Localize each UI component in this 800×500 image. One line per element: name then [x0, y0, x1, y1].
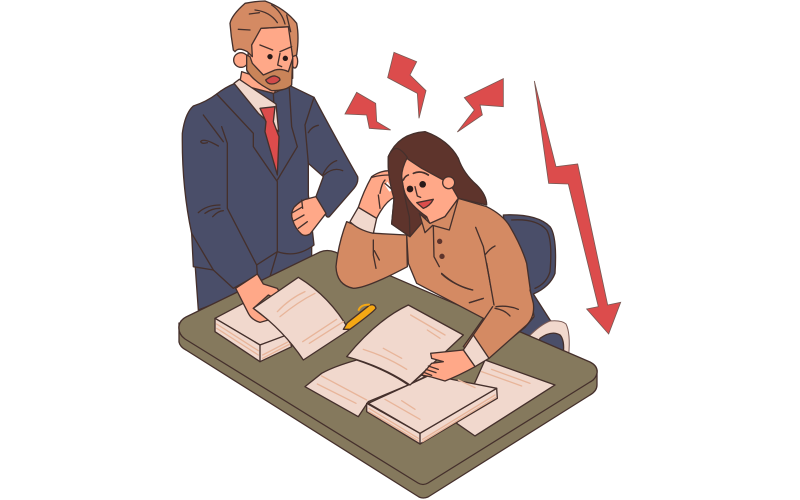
- woman back hair: [388, 132, 487, 237]
- woman sweater torso: [407, 198, 534, 358]
- woman sleeve seams: [442, 263, 518, 316]
- loose sheet under book: [457, 360, 555, 436]
- man hand on hip: [291, 197, 326, 235]
- desk: [179, 250, 597, 498]
- desk top surface: [179, 250, 597, 484]
- left paper stack: [215, 303, 303, 362]
- chair back and base: [503, 215, 563, 353]
- lifted page: [253, 277, 349, 360]
- woman front hair strand: [388, 148, 410, 237]
- woman cuff at wrist: [463, 335, 489, 367]
- chair seat seen through handle: [537, 333, 564, 353]
- woman raised arm: [336, 222, 407, 288]
- woman: stressed employee: [336, 132, 534, 358]
- pen: [343, 305, 376, 329]
- turning page: [347, 305, 463, 385]
- man jacket: [182, 83, 358, 288]
- open book block: [367, 375, 497, 444]
- papers and hands on desk: [215, 263, 555, 444]
- bolt left: [345, 92, 391, 130]
- chair: [503, 215, 569, 355]
- chair handle: [529, 321, 569, 355]
- man trousers: [195, 245, 312, 310]
- bolt center: [388, 52, 426, 118]
- man shirt collar: [234, 79, 279, 132]
- man: angry boss: [182, 1, 358, 310]
- lightning bolts and falling arrow: [345, 52, 621, 334]
- woman hand on head: [358, 171, 395, 218]
- man neck: [240, 72, 277, 104]
- desk side edge: [179, 323, 597, 498]
- falling zigzag arrow: [534, 81, 621, 334]
- woman sweater details and buttons: [373, 227, 518, 316]
- woman cuff: [350, 207, 377, 233]
- man red tie: [260, 107, 279, 175]
- man hand on paper: [236, 274, 279, 322]
- woman shirt collar: [419, 198, 458, 233]
- bolt right: [457, 79, 503, 132]
- woman face: [401, 158, 458, 224]
- man head: [230, 1, 298, 91]
- woman hand on book: [412, 350, 475, 383]
- woman forearm sleeve: [473, 267, 534, 358]
- open book left sheet: [305, 360, 408, 417]
